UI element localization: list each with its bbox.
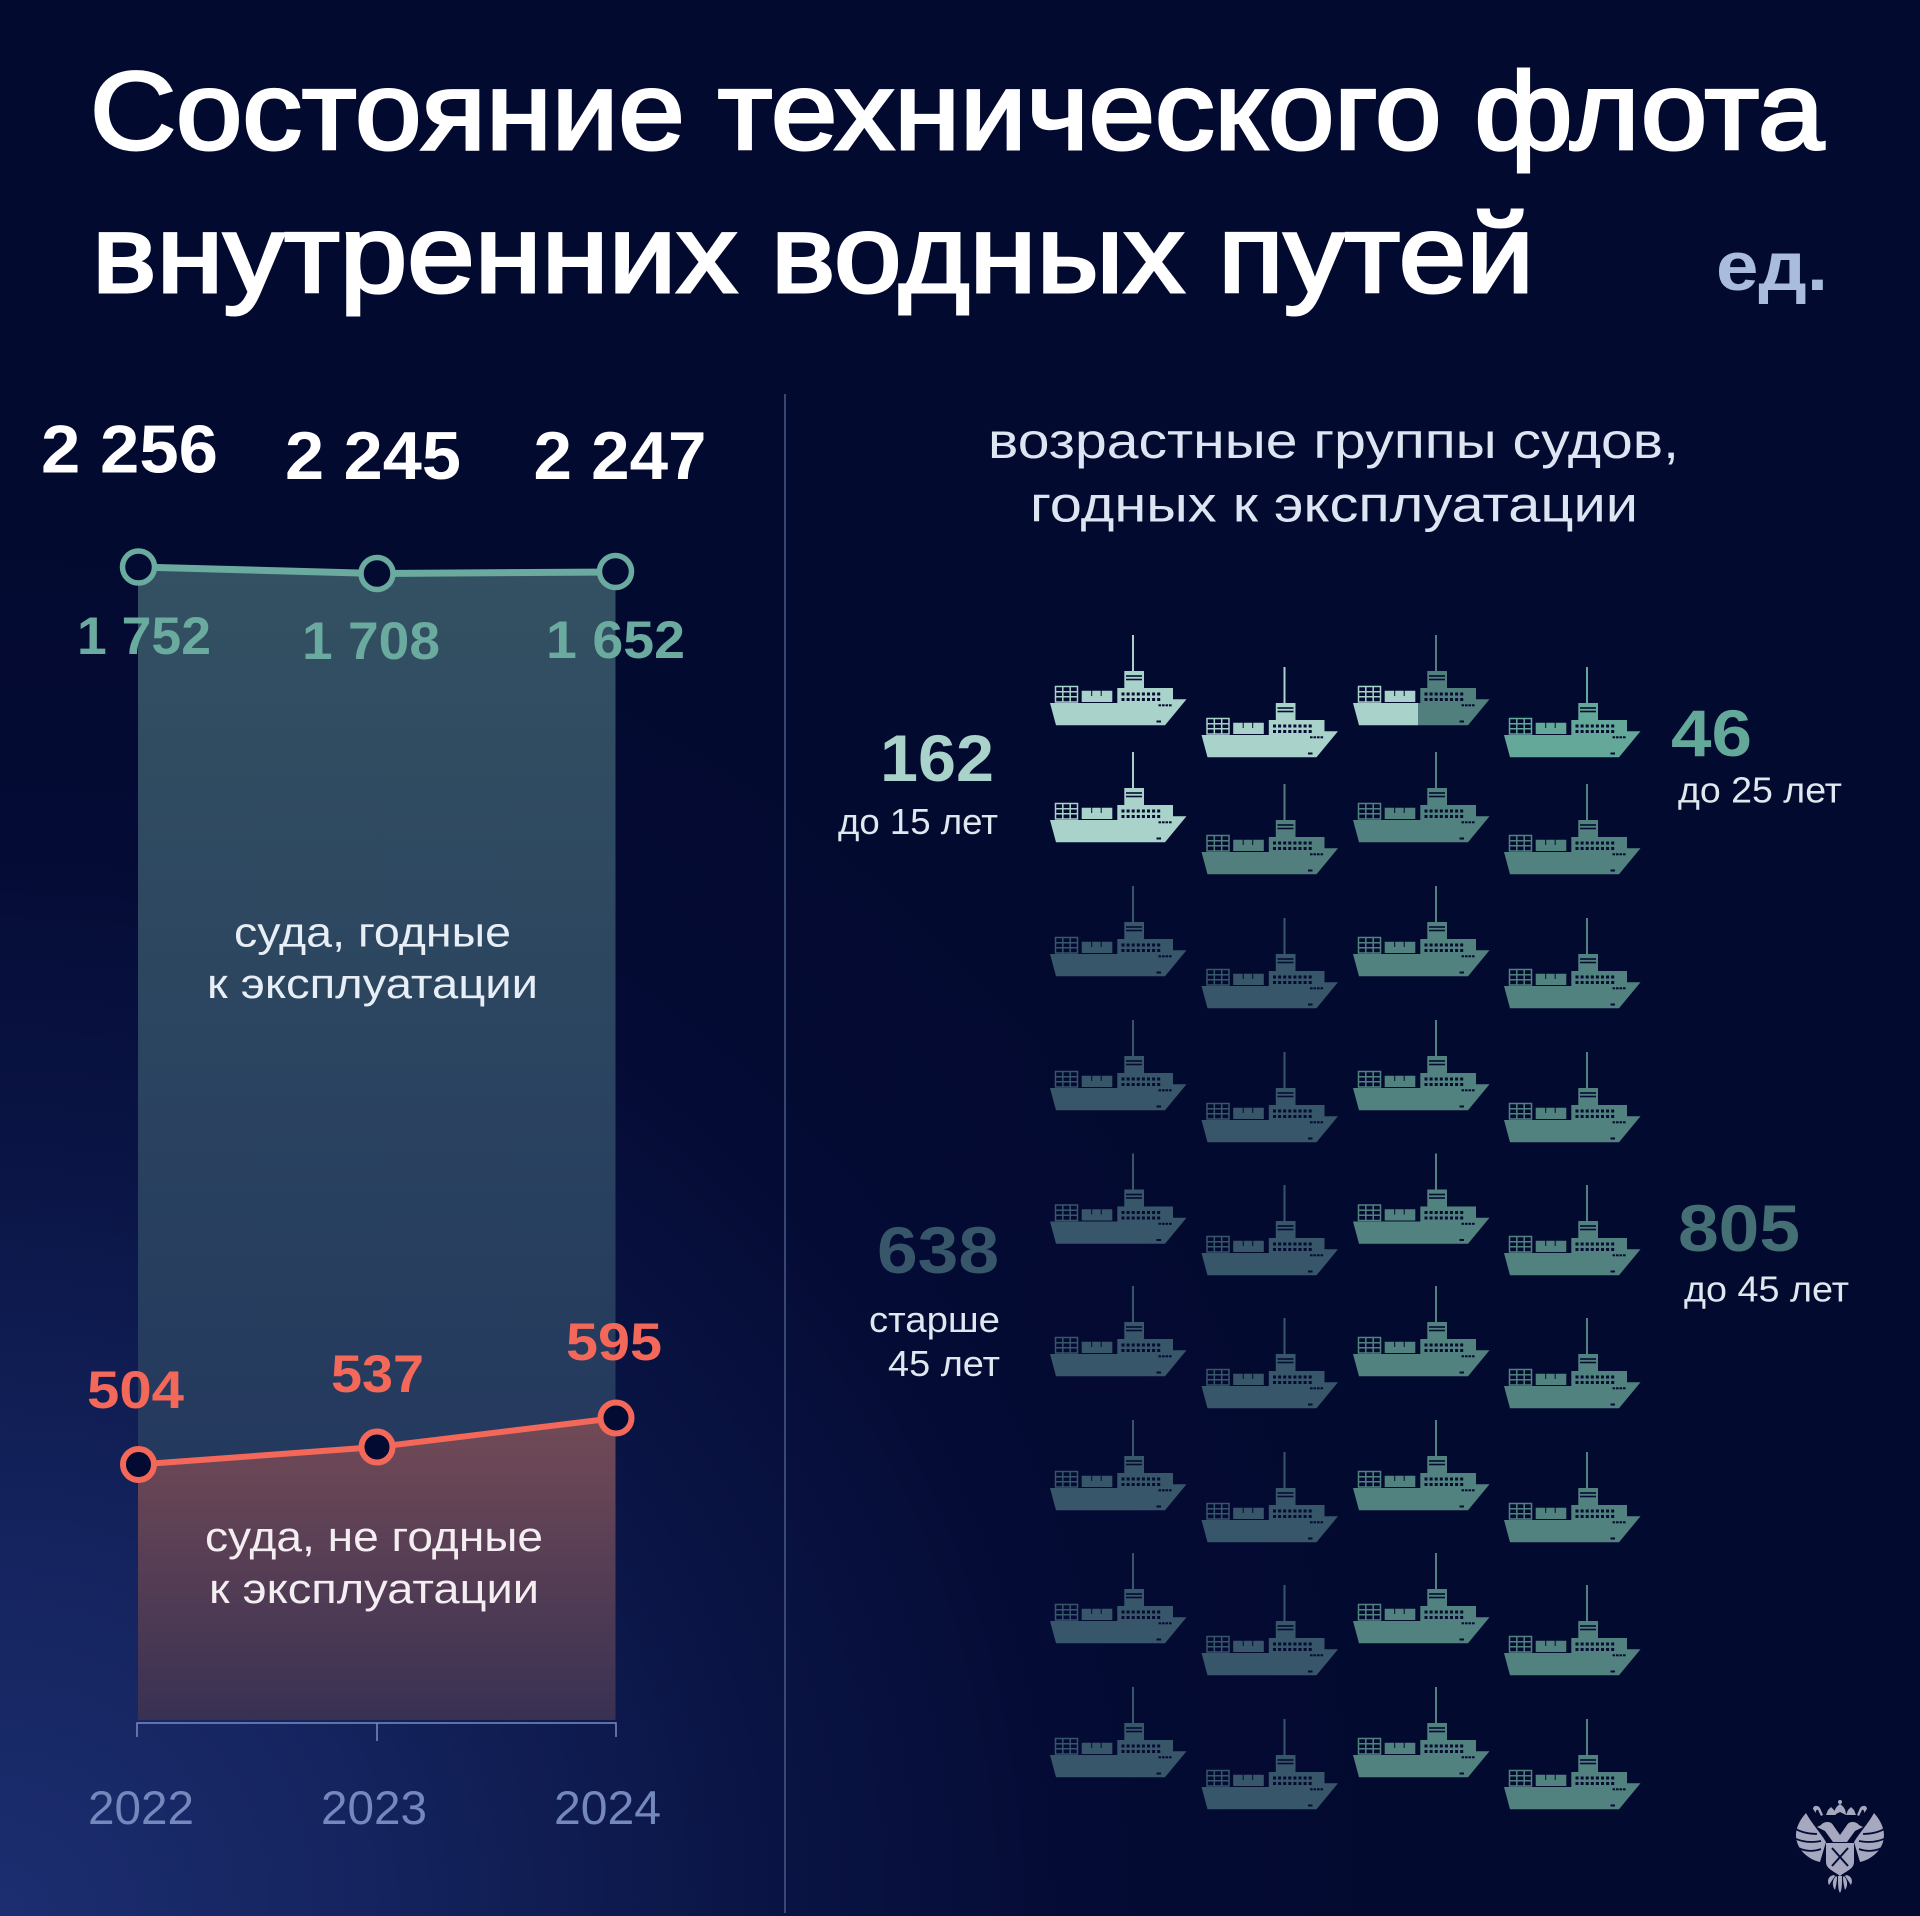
fit vessels values: 1 752 — [77, 607, 211, 666]
ships column 1 — [1050, 635, 1186, 1777]
panel: line chart of fleet by year — [41, 412, 706, 1834]
year labels — [88, 1781, 661, 1834]
icon: emblem double-headed eagle — [1794, 1800, 1886, 1893]
callout: 46 up to 25 years — [1671, 696, 1842, 810]
callout: 638 older than 45 years: 638 — [877, 1213, 999, 1287]
label: fit for operation: суда, годные — [234, 908, 511, 956]
totals by year: 2 245 — [285, 418, 461, 494]
chart: unfit vessels line — [123, 1402, 632, 1480]
label: fit for operation: к эксплуатации — [207, 960, 538, 1007]
totals by year — [41, 412, 706, 494]
callout: 805 up to 45 years — [1678, 1191, 1849, 1310]
heading: age groups — [988, 413, 1679, 532]
fit vessels values: 1 708 — [302, 612, 440, 671]
callout: 805 up to 45 years: до 45 лет — [1684, 1268, 1849, 1310]
chart: fit vessels line — [122, 551, 632, 590]
chart: axis with ticks — [137, 1723, 616, 1741]
ships column 2 — [1202, 667, 1338, 1809]
chart: area of ships unfit for operation — [138, 1418, 616, 1720]
year labels: 2024 — [554, 1781, 661, 1834]
unfit vessels values: 504 — [87, 1361, 185, 1420]
ships column 4 — [1504, 667, 1640, 1809]
title: Состояние технического флота — [90, 50, 1825, 173]
totals by year: 2 247 — [534, 418, 706, 494]
panel: ships pictogram — [1050, 635, 1640, 1809]
label: fit for operation — [207, 908, 538, 1007]
callout: 638 older than 45 years — [869, 1213, 1000, 1384]
year labels: 2022 — [88, 1781, 194, 1834]
unit label: ед. — [1716, 227, 1828, 305]
fit vessels values — [77, 607, 685, 671]
chart: area of ships fit for operation — [138, 567, 616, 1464]
callout: 46 up to 25 years: 46 — [1671, 696, 1752, 770]
heading: age groups: годных к эксплуатации — [1030, 476, 1638, 532]
panel divider — [784, 394, 786, 1913]
unfit vessels values: 595 — [566, 1313, 662, 1372]
label: unfit for operation: суда, не годные — [205, 1513, 543, 1560]
callout: 162 up to 15 years: 162 — [880, 721, 994, 795]
callout: 162 up to 15 years — [838, 721, 998, 842]
callout: 805 up to 45 years: 805 — [1678, 1191, 1800, 1265]
title: внутренних водных путей — [92, 193, 1534, 316]
ships column 3 — [1353, 635, 1490, 1777]
unfit vessels values — [87, 1313, 662, 1420]
label: unfit for operation: к эксплуатации — [209, 1565, 539, 1612]
totals by year: 2 256 — [41, 412, 218, 488]
year labels: 2023 — [321, 1781, 427, 1834]
label: unfit for operation — [205, 1513, 543, 1612]
unfit vessels values: 537 — [331, 1345, 424, 1404]
title — [90, 50, 1825, 316]
callout: 638 older than 45 years: старше — [869, 1299, 1000, 1340]
heading: age groups: возрастные группы судов, — [988, 413, 1679, 469]
callout: 638 older than 45 years: 45 лет — [888, 1343, 1000, 1384]
callout: 162 up to 15 years: до 15 лет — [838, 801, 998, 842]
fit vessels values: 1 652 — [546, 611, 685, 670]
callout: 46 up to 25 years: до 25 лет — [1678, 770, 1842, 810]
